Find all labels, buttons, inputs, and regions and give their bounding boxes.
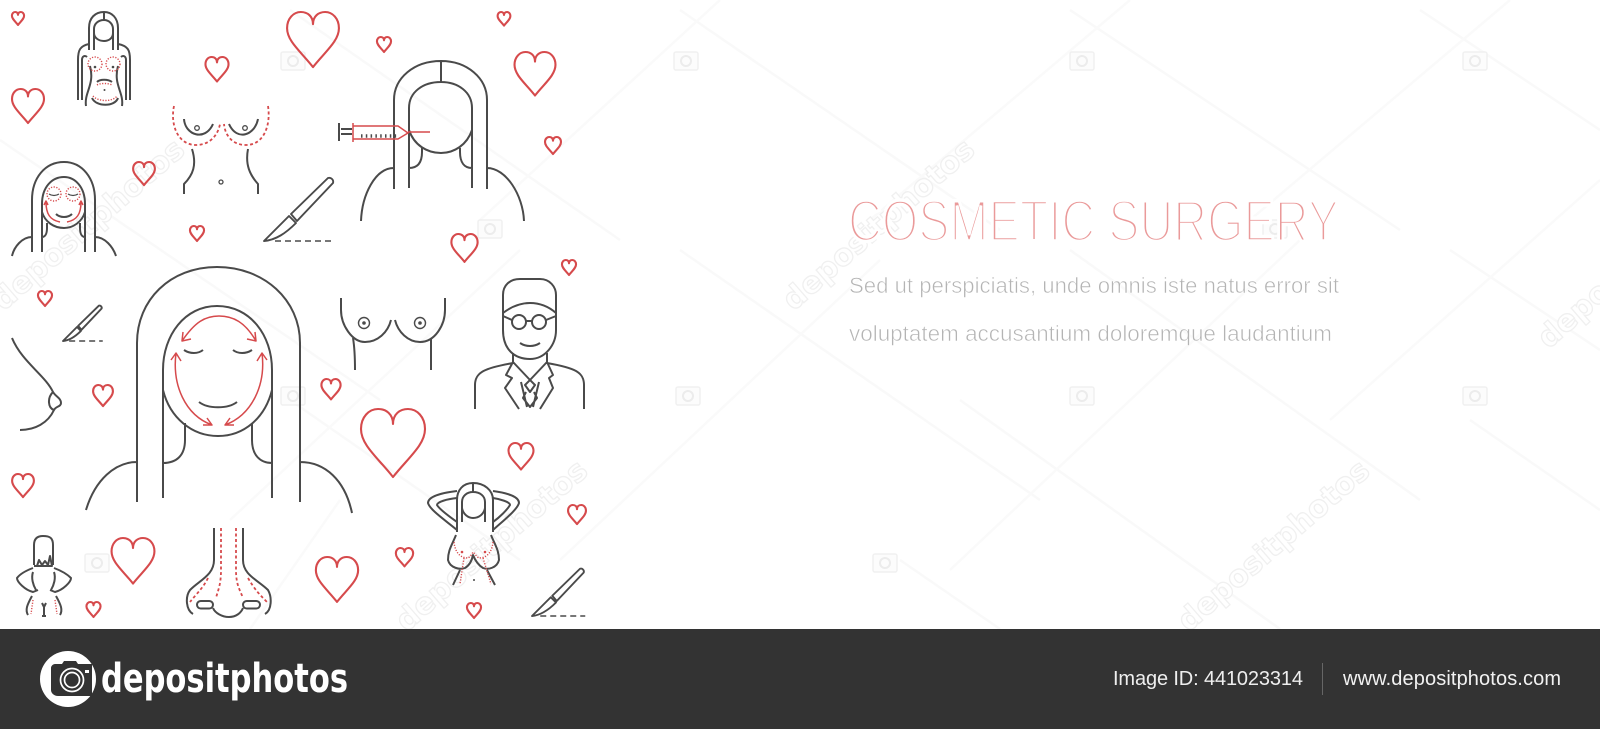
- icon: woman body with marked zones: [78, 12, 130, 106]
- watermark overlay: depositphotos: [1171, 453, 1377, 639]
- heart: [93, 385, 113, 406]
- heart: [509, 443, 533, 470]
- website: www.depositphotos.com: [1342, 668, 1561, 690]
- heart: [133, 162, 155, 185]
- hearts scattered: [12, 12, 586, 618]
- text block: voluptatem accusantium doloremque laudantium: [849, 321, 1332, 346]
- icon: doctor: [475, 279, 584, 409]
- heart: [190, 226, 204, 241]
- icon: breast profile: [12, 338, 61, 430]
- icon: small woman with eye and cheek zones: [12, 162, 116, 256]
- footer bar: [0, 629, 1600, 729]
- heart: [562, 260, 576, 275]
- image id: Image ID: 441023314: [1113, 668, 1303, 690]
- heart: [12, 474, 34, 497]
- watermark overlay: depositphotos: [776, 132, 982, 318]
- heart: [467, 603, 481, 618]
- icon: scalpel bottom: [532, 569, 585, 616]
- face lift arrows: [171, 316, 267, 425]
- icon: scalpel top: [264, 178, 335, 241]
- heart: [112, 538, 154, 584]
- heart: [396, 548, 413, 566]
- heart: [498, 12, 510, 26]
- heart: [12, 89, 44, 123]
- heart: [38, 291, 52, 306]
- icon: scalpel small: [63, 306, 103, 341]
- heart: [205, 57, 229, 81]
- icon: breasts front view: [341, 298, 445, 370]
- text block: [849, 273, 1339, 346]
- heart: [361, 409, 425, 477]
- icon: camera logo: [40, 651, 96, 707]
- heart: [316, 557, 358, 602]
- icon: female torso with dashed chest lines: [173, 106, 269, 194]
- heart: [451, 234, 478, 262]
- heart: [568, 505, 586, 524]
- heart: [287, 12, 339, 67]
- heart: [86, 602, 101, 617]
- watermark overlay: depositphotos: [389, 453, 595, 639]
- logo wordmark: depositphotos: [101, 656, 348, 702]
- title: COSMETIC SURGERY: [848, 189, 1339, 254]
- text block: Sed ut perspiciatis, unde omnis iste natus error sit: [849, 273, 1339, 298]
- icon: back view woman: [17, 536, 71, 616]
- heart: [321, 379, 341, 399]
- icon: nose: [187, 528, 271, 617]
- heart: [377, 37, 391, 52]
- icon: woman with arms behind head: [428, 483, 519, 585]
- icon: woman with syringe: [339, 61, 524, 221]
- heart: [12, 12, 24, 25]
- heart: [545, 137, 561, 154]
- icon: large woman with face lift arrows: [86, 267, 352, 513]
- heart: [515, 52, 555, 96]
- icon: syringe: [339, 123, 430, 142]
